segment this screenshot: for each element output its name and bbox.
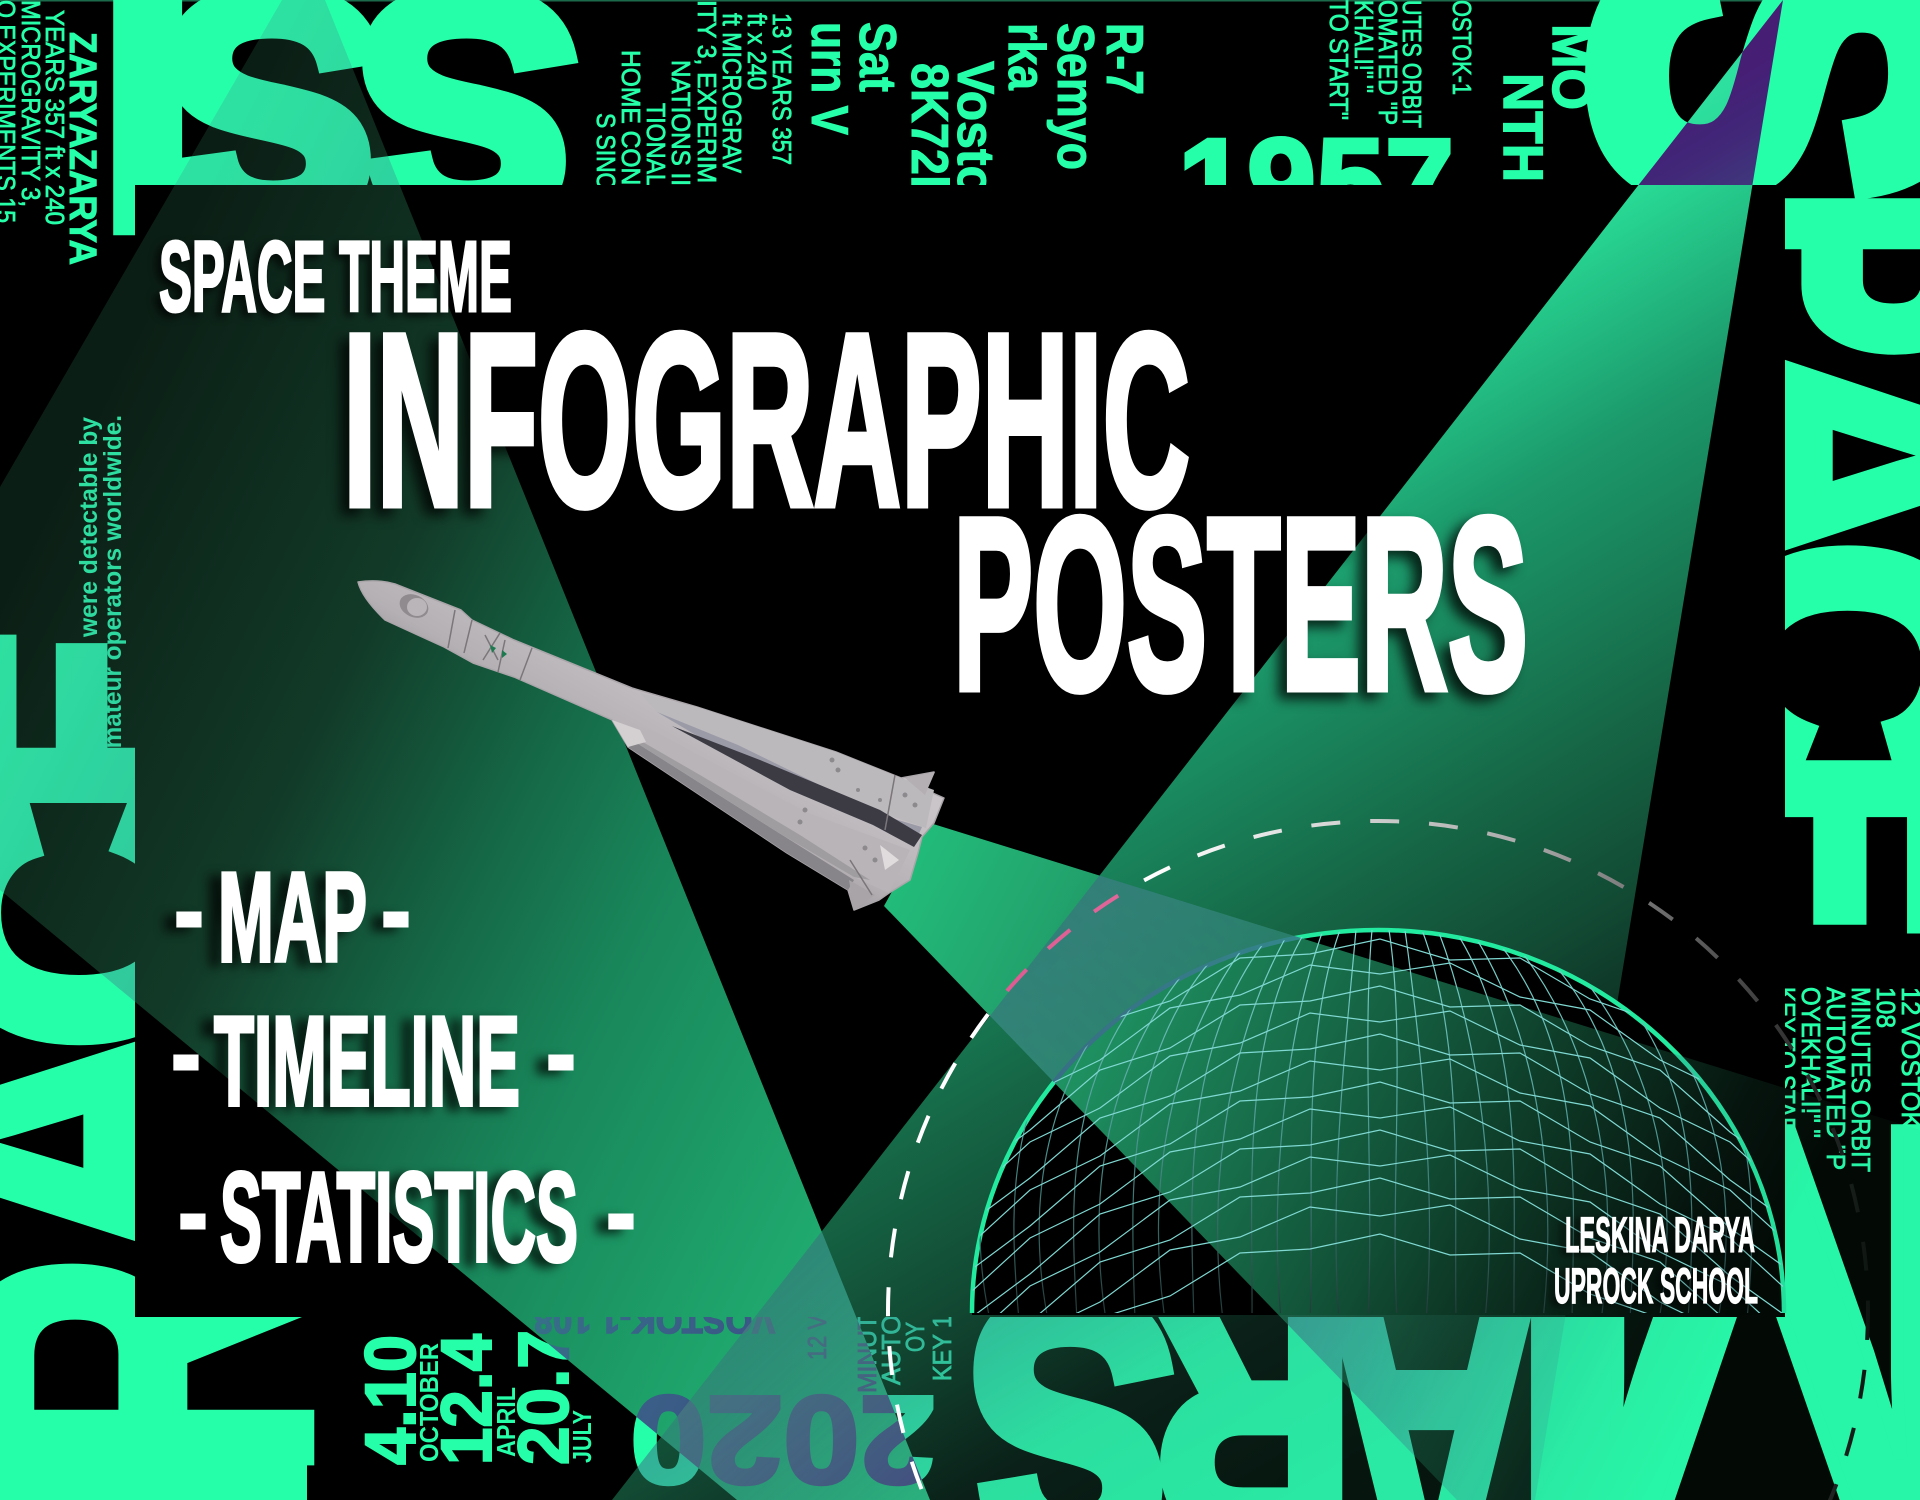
list item: timeline: - (170, 983, 202, 1122)
text block: rocket names: 8K72l (900, 63, 958, 188)
text block: rocket names: Semyo (1046, 23, 1104, 170)
list item: statistics (177, 1142, 637, 1288)
text block: rocket names (800, 22, 1153, 196)
text block: ISS facts, top middle: ft MICROGRAV (717, 13, 747, 174)
dashed orbit arc (888, 821, 1868, 1500)
credit: author and school (1554, 1207, 1758, 1314)
big word: ISS (89, 0, 576, 306)
list item: map: - (173, 840, 205, 979)
text block: Vostok-1, right: AUTOMATED "P (1821, 987, 1851, 1170)
text block: Zarya column, top left: ZARYAZARYA (61, 32, 103, 265)
central black frame (135, 185, 1785, 1317)
text block: Vostok facts, top right (1324, 0, 1477, 128)
text block: Vostok-1, right: OYEKHALI!" " (1796, 987, 1826, 1138)
text block: ISS facts, top middle: S SINC (591, 113, 621, 189)
text block: bottom middle: AUTO (876, 1315, 906, 1385)
text block: amateur operators, left: amateur operators worldwide. (99, 415, 127, 762)
planet dome outline (972, 930, 1784, 1315)
dates column, bottom left (352, 1330, 597, 1465)
label: Vostok-1 108: VOSTOK-1 108 (534, 1300, 775, 1341)
dates column, bottom left: APRIL (491, 1387, 521, 1457)
text block: Vostok facts, top right: OSTOK-1 (1447, 0, 1477, 95)
list item: map: - (380, 840, 412, 979)
list item: timeline: TIMELINE (214, 990, 520, 1132)
text block: Vostok-1, right: MINUTES ORBIT (1846, 987, 1876, 1172)
text block: Vostok facts, top right: TO START" (1324, 0, 1354, 120)
label: month: NTH (1492, 73, 1555, 182)
text: SPACE THEME (159, 221, 512, 333)
text block: Vostok-1, right: KEY TO START (1771, 987, 1801, 1147)
dates column, bottom left: 12.4 (428, 1334, 507, 1465)
text block: rocket names: urn V (800, 22, 858, 135)
text block: bottom middle: 12 V (802, 1314, 832, 1360)
dates column, bottom left: OCTOBER (414, 1343, 444, 1462)
text block: amateur operators, left: were detectable by (75, 417, 103, 638)
label: month: MO (1541, 24, 1604, 110)
text block: bottom middle: MINUT (852, 1315, 882, 1393)
text block: ISS facts, top middle: HOME CON' (616, 50, 646, 190)
dates column, bottom left: 4.10 (352, 1335, 431, 1465)
text block: Zarya column, top left (0, 0, 103, 265)
text block: rocket names: Sat (848, 22, 906, 92)
text block: bottom middle: KEY 1 (927, 1315, 957, 1381)
label: month (1492, 24, 1604, 182)
text block: ISS facts, top middle: NATIONS II (666, 60, 696, 186)
rocket silhouette (358, 581, 944, 910)
text block: ISS facts, top middle: ITY 3, EXPERIMI (692, 0, 722, 190)
text block: Vostok facts, top right: UTES ORBIT (1397, 0, 1427, 128)
text block: bottom middle: OY (900, 1322, 930, 1352)
text block: ISS facts, top middle (591, 0, 797, 190)
text block: Zarya column, top left: MICROGRAVITY 3, (16, 0, 46, 207)
text block: ISS facts, top middle: ft x 240 (742, 13, 772, 90)
rocket exhaust beam (884, 823, 1920, 1500)
text block: Vostok facts, top right: KHALI!" " (1349, 0, 1379, 93)
rocket (358, 581, 944, 910)
light beam: top right to bottom left (612, 0, 1783, 1500)
text block: Vostok-1, right: 108 (1871, 987, 1901, 1028)
dates column, bottom left: JULY (567, 1410, 597, 1463)
light beam: top left to bottom (0, 0, 930, 1500)
planet mesh (972, 930, 1783, 1313)
text block: rocket names: Vosto (946, 61, 1004, 196)
dates column, bottom left: 20.7 (505, 1330, 584, 1465)
text block: ISS facts, top middle: TIONAL (641, 103, 671, 187)
big word: SPACE, right column (1498, 0, 1920, 943)
year: 1957: 1957 (1178, 114, 1454, 253)
text block: ISS facts, top middle: 13 YEARS 357 (767, 13, 797, 165)
list item: timeline (170, 983, 577, 1132)
list item: map (173, 840, 412, 988)
big word: RACE, left column (0, 625, 411, 1500)
list item: statistics: STATISTICS (220, 1146, 578, 1288)
top hairline (0, 0, 1920, 2)
list item: map: MAP (218, 846, 367, 988)
text block: rocket names: rka (997, 23, 1055, 91)
text block: amateur operators, left (75, 415, 127, 762)
text block: Vostok-1, right (1771, 987, 1920, 1172)
list item: statistics: - (177, 1142, 209, 1281)
big word: MARS (971, 1006, 1920, 1500)
text block: bottom middle (802, 1314, 957, 1393)
text block: Vostok facts, top right: OMATED "P (1373, 0, 1403, 125)
text block: Zarya column, top left: YEARS 357 ft x 240 (40, 10, 70, 225)
list item: statistics: - (605, 1142, 637, 1281)
text block: rocket names: R-7 (1095, 23, 1153, 95)
list item: timeline: - (545, 983, 577, 1122)
